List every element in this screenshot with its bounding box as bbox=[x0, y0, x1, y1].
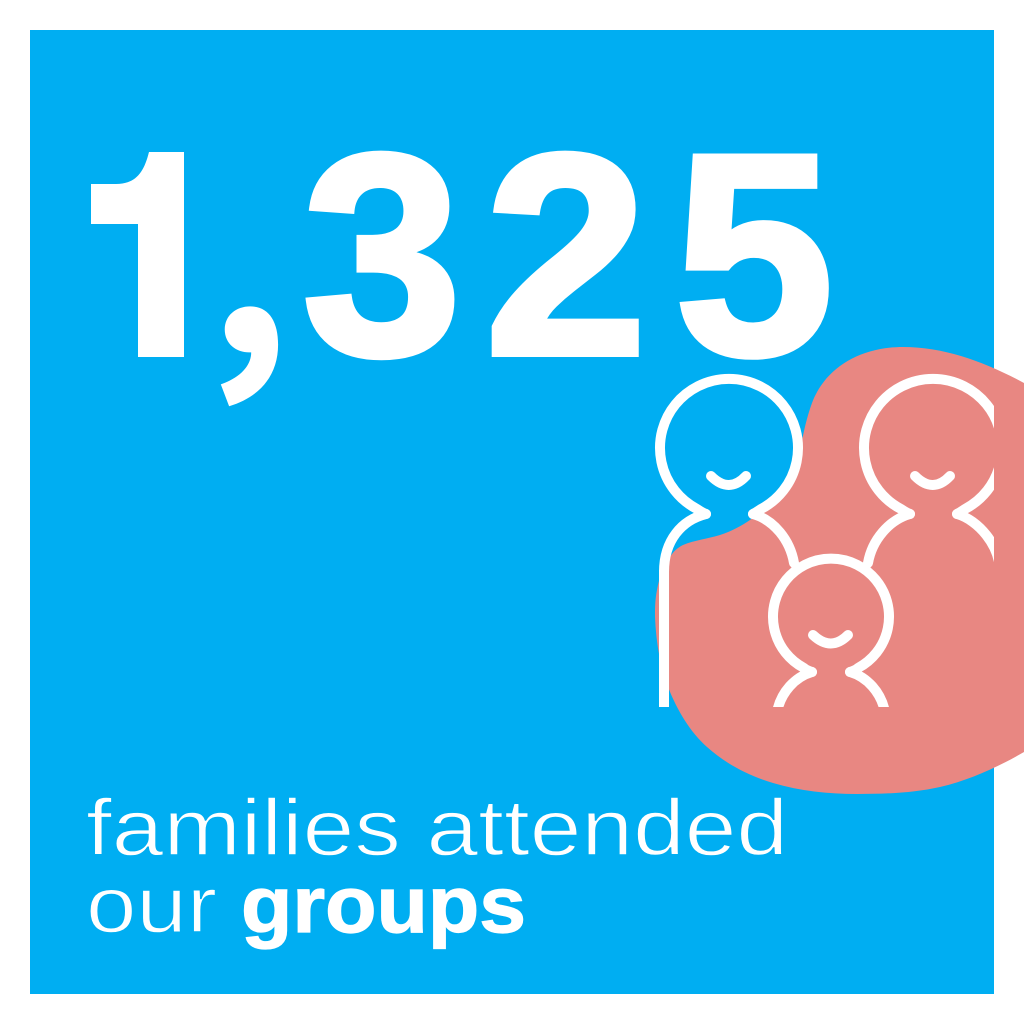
caption word groups: groups bbox=[241, 860, 526, 949]
caption line 1: families attended bbox=[86, 783, 788, 872]
digit 1 bbox=[91, 152, 184, 357]
digit 5: 5 bbox=[674, 94, 834, 415]
caption word our: our bbox=[86, 860, 217, 949]
digit 3: 3 bbox=[302, 94, 462, 415]
digit 2: 2 bbox=[485, 96, 647, 415]
digit 1: 1 bbox=[36, 95, 286, 415]
pink blob bbox=[655, 347, 1024, 794]
adult figure left bbox=[660, 379, 798, 712]
adult figure right bbox=[864, 379, 1002, 572]
icon: family of three bbox=[660, 379, 1002, 712]
child figure bbox=[773, 559, 889, 712]
big number 1,325 bbox=[91, 150, 829, 406]
comma: , bbox=[209, 88, 289, 421]
caption bbox=[86, 783, 788, 949]
